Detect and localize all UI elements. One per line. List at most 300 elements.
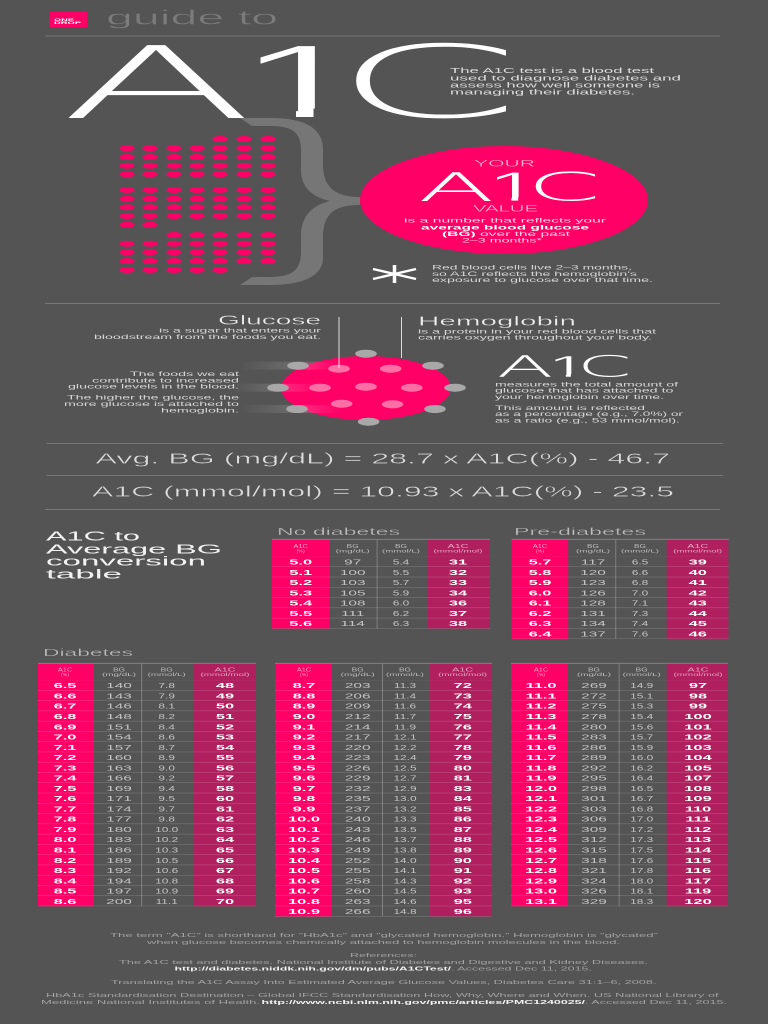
table: diabetes column 1: 54 [216, 744, 234, 751]
table: diabetes column 1: 10.2 [155, 837, 178, 844]
table: diabetes column 1: 171 [106, 795, 132, 803]
table: diabetes column 1: A1C [58, 668, 72, 674]
table: diabetes column 3: 269 [581, 682, 607, 690]
table: pre-diabetes: 126 [580, 589, 606, 597]
table: diabetes column 3: 15.3 [630, 703, 653, 711]
table: diabetes column 3: 309 [581, 826, 607, 834]
table: no diabetes: 5.0 [289, 558, 312, 566]
table: diabetes column 3: 303 [581, 805, 607, 813]
table: diabetes column 1: 10.3 [155, 847, 178, 855]
table: diabetes column 2: 10.0 [288, 816, 320, 823]
table: diabetes column 3: 102 [684, 733, 712, 741]
table: no diabetes: (mg/dL) [336, 549, 371, 554]
table: diabetes column 1: 68 [216, 877, 234, 885]
table: diabetes column 1: 180 [106, 826, 132, 834]
table: pre-diabetes: 131 [580, 609, 606, 618]
table: diabetes column 2: 260 [345, 887, 371, 895]
table: diabetes column 1: 154 [106, 733, 132, 741]
table: diabetes column 1: 8.3 [54, 867, 76, 875]
table: diabetes column 2: A1C [452, 668, 473, 674]
table: diabetes column 1: 183 [106, 836, 132, 844]
table: no diabetes: 5.4 [289, 599, 312, 607]
table: diabetes column 2: 92 [454, 877, 472, 885]
table: diabetes column 1: BG [113, 668, 125, 674]
table: diabetes column 3: 289 [581, 754, 607, 762]
panel: your A1C value oval: C [527, 164, 601, 210]
table: pre-diabetes: 128 [580, 599, 606, 607]
heading: conversion table: Average BG [46, 542, 222, 557]
table: no diabetes: 108 [340, 599, 366, 607]
table: diabetes column 3: 109 [684, 795, 712, 803]
table: pre-diabetes: 6.6 [632, 569, 648, 577]
table: diabetes column 2: 14.6 [393, 898, 417, 906]
table: diabetes column 3: 116 [685, 867, 711, 875]
table: diabetes column 2: 217 [345, 733, 371, 741]
table: diabetes column 1: 169 [106, 784, 132, 793]
table: diabetes column 1: 7.9 [158, 693, 175, 701]
table: diabetes column 2: 11.6 [394, 703, 416, 711]
table: diabetes column 1: 9.4 [158, 785, 176, 793]
table: diabetes column 1: 192 [106, 867, 132, 875]
table: diabetes column 1: 8.5 [54, 888, 76, 895]
text: Hemoglobin: Hemoglobin [418, 314, 576, 328]
table: diabetes column 1: 7.2 [54, 754, 76, 762]
table: diabetes column 3: 298 [581, 784, 607, 793]
table: diabetes column 3: 15.4 [630, 713, 654, 721]
intro text: used to diagnose diabetes and [450, 75, 681, 82]
table: diabetes column 3: 107 [684, 775, 712, 782]
table: diabetes column 3: 12.0 [525, 785, 557, 793]
table: diabetes column 2: 12.4 [393, 754, 417, 762]
table: diabetes column 3 [511, 663, 728, 906]
intro text: managing their diabetes. [450, 89, 635, 96]
table: diabetes column 2: 14.3 [393, 878, 417, 885]
table: diabetes column 1: 10.6 [155, 867, 178, 875]
logo: One Drop: ONE [54, 18, 76, 22]
table: diabetes column 2: 87 [454, 826, 472, 834]
table: diabetes column 3: 13.1 [525, 898, 557, 906]
text: Glucose [94, 314, 322, 341]
table: diabetes column 2: 13.3 [393, 816, 417, 824]
table: diabetes column 1: 70 [216, 898, 234, 906]
text: Hemoglobin: is a protein in your red blood cells that [418, 328, 657, 335]
table: diabetes column 1: 174 [106, 805, 132, 813]
table: diabetes column 3: 99 [689, 703, 707, 710]
icon: curly brace [240, 118, 360, 285]
intro text: assess how well someone is [450, 82, 661, 89]
table: diabetes column 2: 203 [345, 682, 371, 690]
table: diabetes column 2: 10.8 [288, 898, 320, 906]
table: diabetes column 1: 11.1 [156, 898, 178, 906]
table: diabetes column 1: 66 [216, 857, 234, 864]
table: diabetes column 1: 9.7 [158, 806, 175, 814]
table: diabetes column 2: (%) [300, 672, 309, 677]
panel: your A1C value oval: is a number that reflects your [404, 217, 608, 224]
table: pre-diabetes: 44 [689, 610, 707, 618]
table: diabetes column 2: 86 [454, 816, 472, 823]
intro text: The A1C test is a blood test [450, 68, 654, 75]
table: diabetes column 1: 62 [216, 816, 234, 823]
table: diabetes column 2: 252 [345, 856, 371, 865]
table: diabetes column 2: 9.0 [293, 713, 315, 721]
table: diabetes column 2: 12.5 [393, 765, 417, 773]
table: pre-diabetes: 137 [580, 630, 606, 638]
table: diabetes column 2: 226 [345, 764, 371, 772]
table: diabetes column 2: 80 [454, 764, 472, 772]
table: diabetes column 3: 278 [581, 713, 607, 721]
table: pre-diabetes: 6.5 [632, 559, 649, 567]
footer: notes and references: Medicine National Institutes of Health. [41, 1000, 261, 1006]
table: diabetes column 1: 194 [106, 877, 132, 885]
table: diabetes column 3: 321 [581, 867, 607, 875]
table: diabetes column 1: 58 [216, 785, 234, 793]
table: diabetes column 2: 11.3 [394, 682, 416, 690]
table: diabetes column 2: BG [352, 668, 364, 674]
table: diabetes column 3: 11.7 [525, 754, 557, 762]
table: diabetes column 2: 13.0 [393, 795, 417, 803]
table: diabetes column 3: 16.4 [630, 775, 654, 783]
table: diabetes column 3: 17.8 [630, 867, 653, 875]
table: diabetes column 2: 76 [454, 723, 472, 731]
table: diabetes column 2: 9.3 [293, 744, 315, 751]
table: diabetes column 3: 14.9 [630, 682, 653, 690]
text: foods we eat: glucose levels in the blood. [68, 384, 240, 391]
table: diabetes column 1: 61 [216, 805, 234, 813]
table: pre-diabetes: 117 [581, 558, 606, 566]
table: diabetes column 2: 266 [345, 908, 371, 916]
table: diabetes column 2: 12.2 [393, 744, 417, 752]
panel: your A1C value oval: A [418, 164, 495, 210]
text: Hemoglobin: carries oxygen throughout your body. [418, 334, 653, 341]
table: pre-diabetes: (%) [536, 549, 545, 554]
table: diabetes column 1: 9.0 [158, 765, 176, 773]
table: diabetes column 2: 223 [345, 754, 371, 762]
table: diabetes column 3: 16.0 [630, 754, 654, 762]
table: diabetes column 3: 16.7 [630, 795, 653, 803]
table: diabetes column 3: 104 [684, 754, 712, 762]
table: no diabetes: 97 [344, 558, 362, 566]
table: diabetes column 3: 324 [581, 877, 607, 885]
table: diabetes column 3: 114 [685, 846, 711, 854]
table: diabetes column 1: 56 [216, 764, 234, 772]
table: pre-diabetes: 120 [580, 568, 606, 577]
text: A1C measures: glucose that has attached to [495, 388, 675, 394]
table: no diabetes: (%) [297, 549, 305, 554]
table: diabetes column 3: 312 [581, 836, 607, 844]
table: diabetes column 2: 258 [345, 877, 371, 885]
note: red blood cells [432, 264, 654, 284]
table: diabetes column 2: 10.5 [288, 867, 320, 875]
table: diabetes column 3: 120 [684, 898, 712, 906]
text: A1C measures: as a percentage (e.g., 7.0%) or [495, 411, 683, 418]
text: A1C measures: measures the total amount of [495, 381, 679, 388]
table: diabetes column 1: 10.9 [155, 888, 178, 896]
table: diabetes column 2: 235 [345, 795, 371, 803]
table: diabetes column 1: 8.6 [54, 898, 76, 906]
text: foods we eat: hemoglobin. [161, 408, 240, 414]
text: Glucose: is a sugar that enters your [159, 327, 321, 334]
table: diabetes column 1: 6.9 [54, 723, 76, 731]
heading: conversion table: A1C to [46, 529, 140, 544]
table: diabetes column 1: 64 [216, 836, 234, 844]
table: diabetes column 1: 7.8 [54, 816, 76, 823]
table: diabetes column 2: 14.1 [393, 867, 417, 875]
text: A1C measures: This amount is reflected [495, 405, 646, 412]
heading: conversion table [46, 529, 222, 582]
table: diabetes column 2: 9.6 [293, 775, 315, 782]
table: pre-diabetes [512, 539, 729, 639]
heading: conversion table: table [46, 567, 122, 582]
table: diabetes column 2: 14.0 [393, 857, 417, 865]
table: diabetes column 2: A1C [297, 668, 311, 674]
table: diabetes column 1: 7.8 [158, 682, 175, 690]
text: foods we eat: more glucose is attached to [64, 401, 240, 408]
table: diabetes column 3: 18.3 [630, 898, 653, 906]
table: no diabetes: 100 [340, 568, 366, 577]
table: diabetes column 2: 212 [345, 713, 371, 721]
formula: average BG: Avg. BG (mg/dL) = 28.7 x A1C(%) - 46.7 [96, 450, 670, 467]
table: diabetes column 3: (%) [537, 672, 546, 677]
table: diabetes column 3: 111 [685, 816, 711, 823]
table: pre-diabetes: 123 [580, 579, 606, 587]
table: diabetes column 2: 9.8 [293, 795, 315, 803]
table: pre-diabetes: 6.1 [529, 599, 551, 607]
table: diabetes column 3: 318 [581, 856, 607, 865]
table: no diabetes: 32 [449, 569, 467, 576]
table: pre-diabetes: 39 [689, 558, 707, 566]
table: diabetes column 2: 95 [454, 898, 472, 906]
table: diabetes column 1: 63 [216, 826, 234, 834]
table: diabetes column 3: 117 [685, 877, 711, 885]
text: foods we eat: The foods we eat [130, 371, 240, 378]
text: A1C measures: your hemoglobin over time. [495, 394, 665, 401]
table: diabetes column 2: 10.7 [288, 888, 320, 895]
table: diabetes column 1: 186 [106, 846, 132, 854]
table: diabetes column 1: 166 [106, 774, 132, 782]
table: diabetes column 1: 160 [106, 754, 132, 762]
table: no diabetes: 111 [341, 609, 365, 618]
heading: no diabetes: No diabetes [277, 526, 400, 538]
table: diabetes column 3: 108 [684, 785, 712, 793]
table: diabetes column 1: BG [161, 668, 173, 674]
table: diabetes column 2: 13.7 [393, 837, 417, 844]
table: diabetes column 3: 12.6 [525, 846, 557, 854]
table: diabetes column 2: 11.4 [394, 693, 417, 701]
footer: notes and references: The A1C test and diabetes. National Institute of Diabetes and Digestive and Kidney Diseases. [119, 960, 649, 966]
table: no diabetes: 5.7 [393, 579, 409, 587]
table: diabetes column 3: 18.1 [630, 888, 653, 896]
table: pre-diabetes: 42 [689, 589, 707, 597]
table: diabetes column 1: 65 [216, 846, 234, 854]
table: diabetes column 3: 12.1 [525, 795, 557, 803]
table: diabetes column 3: 12.2 [525, 805, 557, 813]
footer: notes and references: The term “A1C” is shorthand for “HbA1c” and “glycated hemoglobin.” Hemoglobin is “glycated” [110, 933, 658, 939]
table: diabetes column 1: 69 [216, 888, 234, 895]
heading: guide to: guide to [106, 8, 278, 30]
table: no diabetes: 6.0 [393, 600, 410, 608]
table: diabetes column 1: 8.1 [158, 703, 175, 711]
table: diabetes column 3: 17.0 [630, 816, 654, 824]
table: diabetes column 2: 8.7 [293, 682, 315, 690]
table: diabetes column 1: (mmol/mol) [200, 672, 250, 677]
table: no diabetes: 6.3 [393, 620, 409, 628]
table: diabetes column 1: 8.0 [54, 836, 76, 844]
panel: your A1C value oval: VALUE [473, 204, 538, 214]
title: A1C: A [60, 26, 254, 142]
table: diabetes column 2: 89 [454, 846, 472, 854]
table: diabetes column 1: 7.0 [54, 733, 76, 741]
heading: diabetes: Diabetes [43, 647, 133, 659]
table: diabetes column 2: 88 [454, 836, 472, 844]
title: A1C: 1 [235, 22, 369, 141]
table: diabetes column 2: 73 [454, 692, 472, 700]
text: Glucose: Glucose [218, 314, 321, 328]
table: no diabetes: 5.3 [289, 589, 312, 597]
table: diabetes column 3: 11.8 [525, 764, 557, 772]
table: diabetes column 3: 115 [685, 857, 711, 864]
table: pre-diabetes: 43 [689, 599, 707, 607]
table: diabetes column 2: 240 [345, 815, 371, 823]
table: diabetes column 2: 78 [454, 744, 472, 751]
table: diabetes column 2: 9.4 [293, 754, 315, 762]
table: diabetes column 3: 12.9 [525, 877, 557, 885]
table: diabetes column 1: 8.6 [158, 734, 175, 742]
table: diabetes column 2: 10.3 [288, 846, 320, 854]
table: diabetes column 2: 10.1 [288, 826, 320, 834]
table: diabetes column 3: 301 [581, 795, 607, 803]
chart: red blood cell dots [119, 136, 276, 273]
table: diabetes column 3: BG [588, 668, 600, 674]
table: diabetes column 1: 7.9 [54, 826, 76, 834]
table: diabetes column 2: 263 [345, 897, 371, 906]
title: A1C: C [334, 24, 520, 141]
table: diabetes column 1: 57 [216, 775, 234, 782]
table: diabetes column 3: 295 [581, 774, 607, 782]
table: diabetes column 3: 11.9 [525, 775, 557, 782]
table: no diabetes: 38 [449, 620, 467, 628]
panel: your A1C value oval: average blood glucose [421, 224, 590, 231]
table: diabetes column 1: 8.1 [54, 846, 76, 854]
table: diabetes column 3: 110 [685, 805, 711, 813]
table: pre-diabetes: 45 [689, 620, 707, 628]
table: diabetes column 3: 286 [581, 743, 607, 752]
table: diabetes column 3: 11.6 [525, 744, 557, 751]
table: diabetes column 1: 51 [216, 713, 234, 721]
table: diabetes column 3: A1C [534, 668, 548, 674]
table: pre-diabetes: 5.8 [529, 569, 551, 576]
table: diabetes column 1: 52 [216, 723, 234, 731]
table: diabetes column 2: 9.1 [293, 723, 315, 731]
table: diabetes column 2: 96 [454, 908, 472, 916]
table: diabetes column 2: 10.4 [288, 857, 320, 864]
table: diabetes column 2: 10.9 [288, 908, 320, 916]
table: diabetes column 2: 93 [454, 888, 472, 895]
table: diabetes column 2: 14.8 [393, 908, 417, 916]
panel: your A1C value oval: YOUR [474, 158, 536, 168]
table: no diabetes: 34 [449, 589, 467, 597]
table: diabetes column 1: 146 [106, 702, 132, 710]
table: no diabetes: 103 [340, 579, 366, 587]
table: diabetes column 2: 12.9 [393, 785, 417, 793]
table: diabetes column 3: 11.1 [525, 692, 557, 700]
table: diabetes column 2: (mg/dL) [341, 672, 376, 677]
table: no diabetes: 5.6 [289, 620, 312, 628]
table: diabetes column 3: 272 [581, 692, 607, 700]
table: diabetes column 3: 119 [685, 888, 711, 895]
table: no diabetes: 33 [449, 579, 467, 587]
table: diabetes column 2: 229 [345, 774, 371, 782]
table: diabetes column 3: (mmol/mol) [674, 672, 723, 677]
table: diabetes column 1: 140 [106, 682, 132, 690]
table: diabetes column 2: 81 [454, 775, 472, 782]
table: diabetes column 2: 77 [454, 733, 472, 741]
table: pre-diabetes: (mg/dL) [576, 549, 611, 554]
table: diabetes column 2: 13.2 [393, 806, 417, 814]
note: red blood cells: exposure to glucose over that time. [432, 277, 654, 284]
table: no diabetes: 31 [449, 558, 467, 566]
table: diabetes column 1: 6.5 [54, 682, 76, 690]
table: diabetes column 1: (mg/dL) [102, 672, 137, 677]
table: diabetes column 2: 232 [345, 784, 371, 793]
table: pre-diabetes: 6.2 [529, 610, 551, 618]
table: diabetes column 2: 14.5 [393, 888, 417, 896]
table: diabetes column 1: 49 [216, 692, 234, 700]
table: pre-diabetes: 6.3 [529, 620, 551, 628]
icon: asterisk [373, 265, 416, 283]
table: pre-diabetes: 5.9 [529, 579, 551, 587]
table: diabetes column 3: 16.8 [630, 806, 653, 814]
table: diabetes column 2: 9.2 [293, 733, 315, 741]
logo: One Drop: DROP [54, 21, 83, 25]
table: pre-diabetes: 7.1 [632, 600, 648, 608]
table: diabetes column 2: 10.6 [288, 877, 320, 885]
table: diabetes column 3: 329 [581, 897, 607, 906]
text: Glucose: bloodstream from the foods you eat. [94, 334, 322, 341]
text: foods we eat [64, 371, 240, 414]
table: diabetes column 1: 200 [106, 897, 132, 906]
table: diabetes column 3: 11.5 [525, 733, 557, 741]
table: pre-diabetes: 6.4 [529, 630, 551, 638]
logo: One Drop [50, 12, 87, 27]
table: diabetes column 1: 48 [216, 682, 234, 690]
table: pre-diabetes: 7.0 [632, 590, 649, 597]
table: diabetes column 3: BG [636, 668, 648, 674]
table: pre-diabetes: (mmol/mol) [673, 549, 723, 554]
table: diabetes column 3: 11.4 [525, 723, 557, 731]
table: pre-diabetes: 7.4 [632, 620, 649, 628]
table: diabetes column 1: 8.2 [158, 713, 175, 721]
table: diabetes column 2: 9.7 [293, 785, 315, 793]
table: diabetes column 2: 13.5 [393, 826, 417, 834]
table: diabetes column 2: 84 [454, 795, 472, 803]
table: diabetes column 3: 12.7 [525, 857, 557, 864]
table: diabetes column 1: 9.2 [158, 775, 175, 783]
table: diabetes column 1: 143 [106, 692, 132, 700]
table: pre-diabetes: BG [634, 544, 646, 550]
table: diabetes column 2: 255 [345, 867, 371, 875]
table: diabetes column 2: 83 [454, 785, 472, 793]
table: diabetes column 2: 12.7 [393, 775, 417, 783]
footer: notes and references: HbA1c Standardisation Destination – Global IFCC Standardisation How, Why, Where and When. US National Library of [46, 993, 719, 999]
table: diabetes column 3: 15.1 [630, 693, 653, 701]
table: diabetes column 3: 11.2 [525, 703, 557, 710]
table: diabetes column 1: 6.6 [54, 692, 76, 700]
table: diabetes column 2: 11.7 [394, 713, 416, 721]
table: diabetes column 2: 13.8 [393, 847, 417, 855]
table: diabetes column 1: 8.4 [158, 724, 176, 731]
table: diabetes column 2: 79 [454, 754, 472, 762]
table: pre-diabetes: 134 [580, 620, 606, 628]
